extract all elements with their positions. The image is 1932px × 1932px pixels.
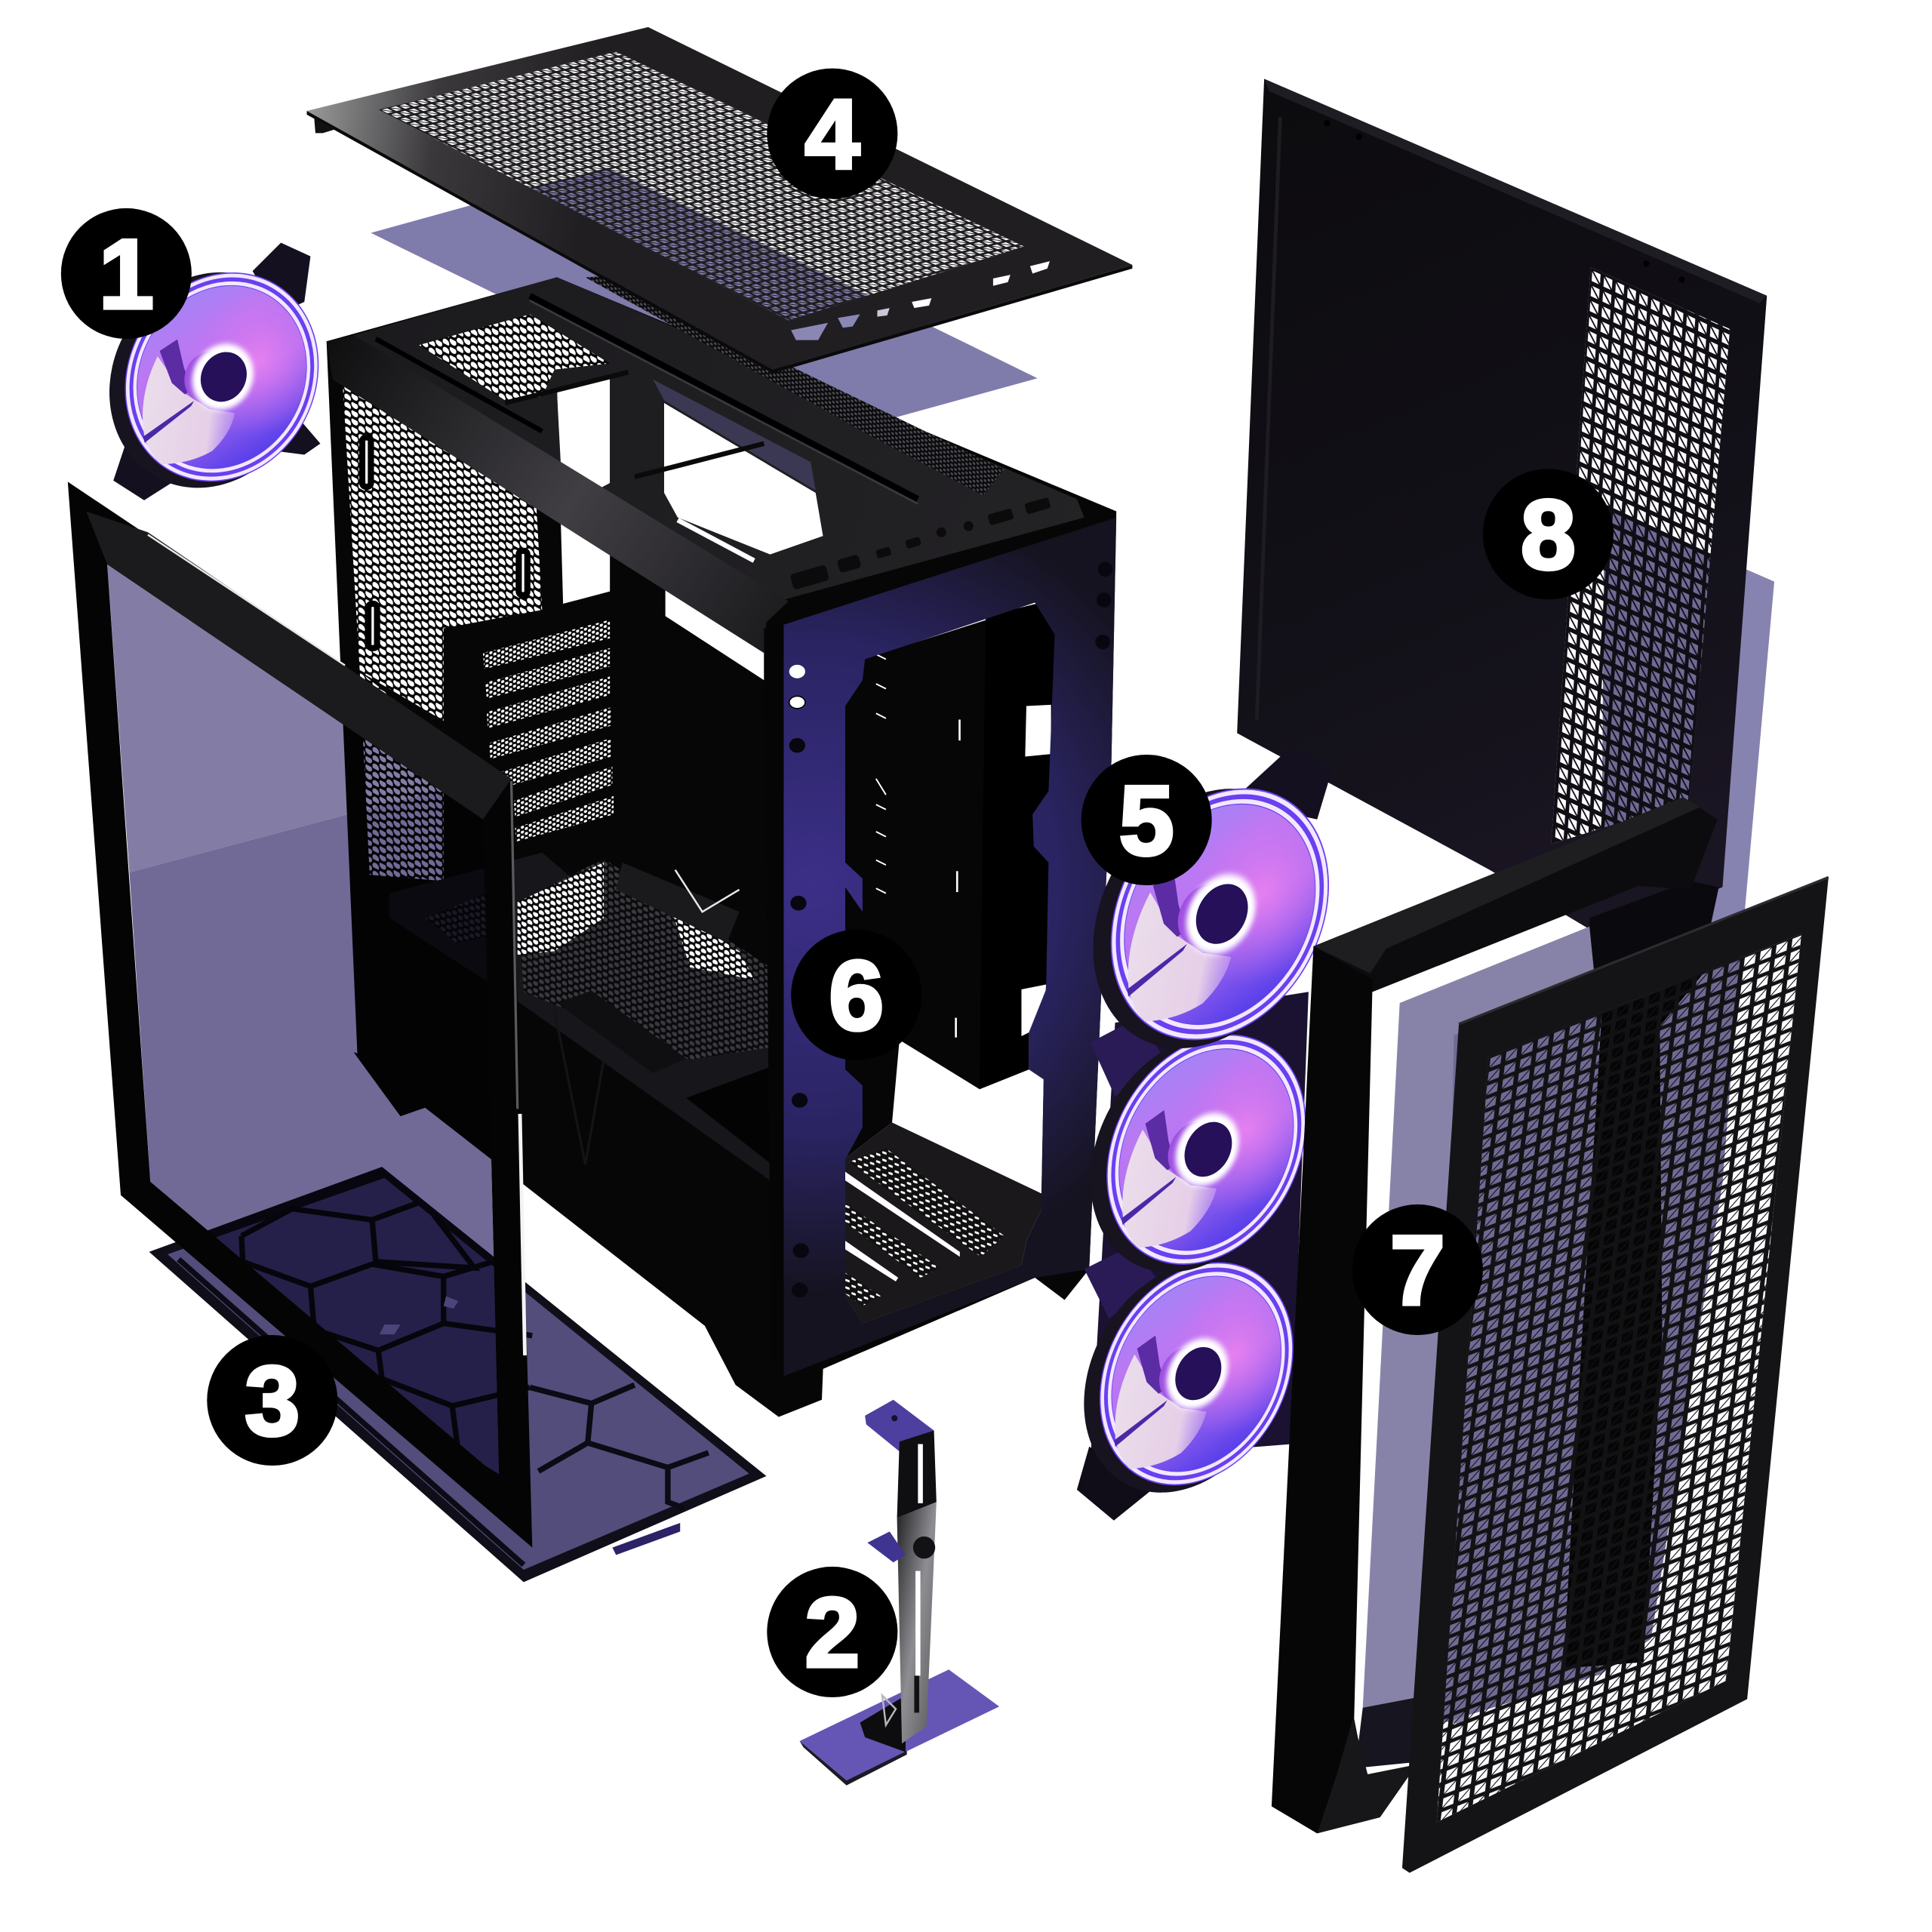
badge 1: 1 [99,219,154,329]
lower fan [994,1168,1383,1586]
badge 7: 7 [1390,1215,1445,1325]
top dust filter mesh [371,168,1038,444]
side panel 8 [1237,78,1767,937]
mid clamp [867,1531,906,1562]
badge 2 [767,1567,897,1697]
front assembly 7 [1272,797,1829,1873]
badge 6 [791,930,921,1060]
top plate [865,1400,934,1451]
frame left pillar [1272,946,1373,1833]
frame top bar [1313,797,1718,992]
mesh seen through strip [1601,508,1712,838]
mesh behind panel holes [1441,949,1741,1724]
foot with logo [860,1696,906,1752]
fan 1 rotor [23,181,405,578]
badge 7 [1352,1204,1483,1335]
upper fan [992,682,1430,1154]
tinted glass [107,565,499,1478]
base plate [800,1669,999,1780]
top panel 4 [307,27,1132,374]
badge 3: 3 [245,1346,300,1456]
bottom dust filter 3 [149,1167,767,1582]
fan stack 5 [992,682,1430,1586]
front frame purple face [764,518,1116,1377]
front opening interior [845,602,1055,1323]
badge 6: 6 [829,940,884,1051]
upright [897,1431,937,1518]
badge 8 [1483,469,1614,599]
front I/O strip buttons [789,497,1051,590]
badge 5 [1081,755,1212,885]
fan stack backing [1091,992,1309,1460]
chassis black silhouette [327,277,1116,1417]
structure behind panel holes [1564,971,1706,1669]
fan 1 brackets [113,243,320,500]
badge 5: 5 [1119,765,1174,875]
side glass panel [68,481,532,1548]
graphics card bracket 2 [800,1400,999,1786]
floor perforation [425,859,770,1073]
right frame pillar [1589,881,1719,1023]
main chassis [327,276,1116,1417]
rear view openings [664,403,823,555]
badge 1 [61,208,192,339]
middle fan [998,937,1398,1368]
rear perforated panel [343,314,610,881]
side panel dust filter mesh [1601,508,1774,974]
door frame [68,481,532,1548]
top tray [354,276,1084,600]
left top rail [327,335,789,653]
badge 4: 4 [805,79,860,189]
fan 1 [23,181,405,578]
badge 4 [767,69,897,199]
front mesh filter [1363,927,1601,1725]
badge 2: 2 [805,1577,860,1687]
bottom plate [845,1122,1042,1323]
badge 8: 8 [1521,479,1576,589]
PSU shroud top [389,853,770,1180]
badge 3 [207,1335,337,1466]
inner cage [845,602,1055,1158]
perforated front panel [1402,877,1829,1873]
expansion slots [483,620,614,841]
